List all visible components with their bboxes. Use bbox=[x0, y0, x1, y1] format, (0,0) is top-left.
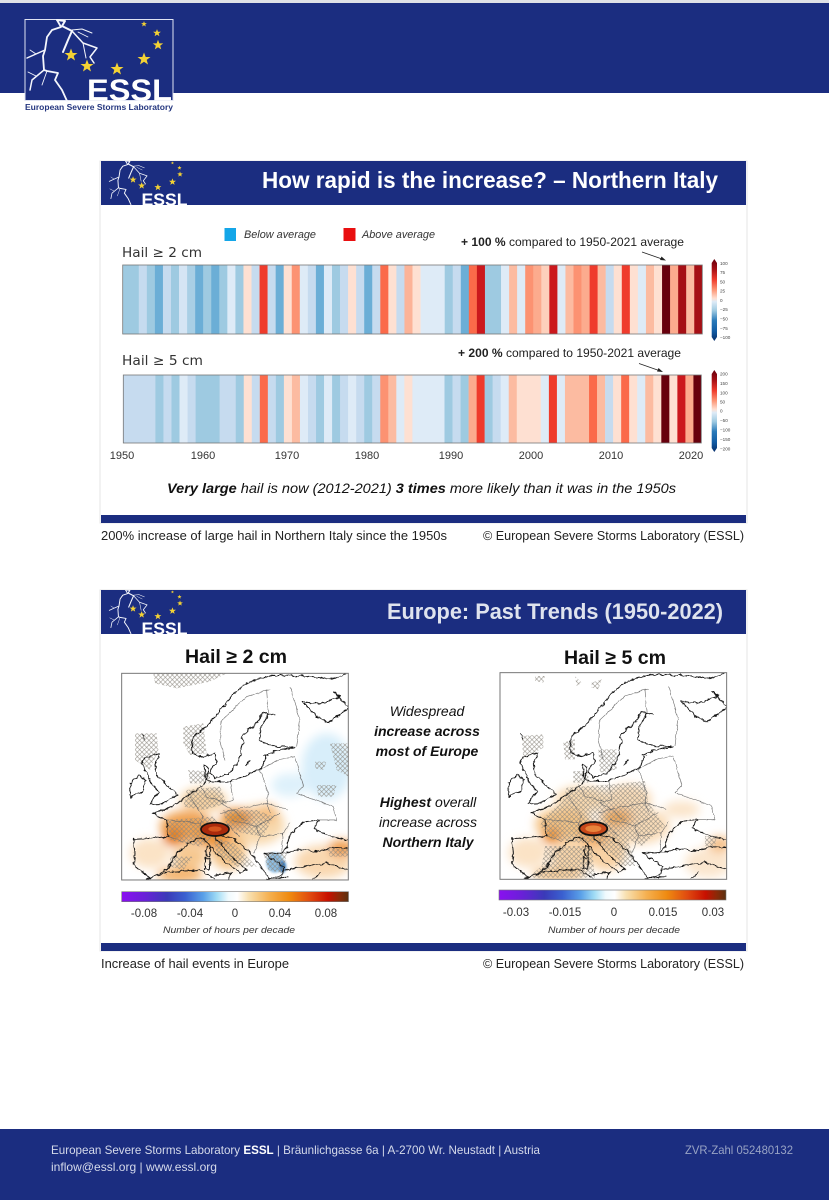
year axis: 2020 bbox=[679, 450, 703, 462]
year axis bbox=[110, 450, 703, 462]
panel footer bar bbox=[101, 943, 746, 951]
footer registration number: ZVR-Zahl 052480132 bbox=[685, 1143, 793, 1157]
colour bar: hail 5 cm map: Number of hours per decade bbox=[548, 925, 680, 936]
year axis: 2010 bbox=[599, 450, 623, 462]
arrow: to 2017 stripe, hail 5 cm bbox=[639, 364, 663, 372]
central text: highest increase bbox=[379, 794, 477, 850]
map: trends hail 2 cm bbox=[122, 673, 355, 883]
colour bar: hail 2 cm map: -0.04 bbox=[177, 908, 204, 920]
label: Hail 2 cm: Hail ≥ 2 cm bbox=[122, 245, 202, 261]
colour scale: hail 5 cm: −150 bbox=[720, 437, 731, 442]
hatched significance areas bbox=[522, 676, 717, 878]
colour scale: hail 2 cm: −75 bbox=[720, 326, 728, 331]
colour bar: hail 5 cm map: -0.03 bbox=[503, 907, 529, 919]
central text: highest increase: increase across bbox=[379, 814, 477, 830]
central text: highest increase: Highest overall bbox=[380, 794, 477, 810]
year axis: 2000 bbox=[519, 450, 543, 462]
footer band bbox=[0, 1129, 829, 1200]
footer address: inflow@essl.org | www.essl.org bbox=[51, 1160, 217, 1174]
legend: Below average bbox=[244, 229, 316, 241]
colour scale: hail 2 cm: 0 bbox=[720, 298, 723, 303]
year axis: 1990 bbox=[439, 450, 463, 462]
heading: Hail 5 cm: Hail ≥ 5 cm bbox=[564, 648, 666, 669]
colour bar: hail 2 cm map: 0.08 bbox=[315, 908, 337, 920]
panel header bar: How rapid is the increase? – Northern Italy bbox=[262, 167, 718, 193]
colour scale: hail 2 cm bbox=[712, 259, 731, 341]
colour scale: hail 5 cm: 150 bbox=[720, 381, 728, 386]
colour bar: hail 2 cm map: -0.08 bbox=[131, 908, 157, 920]
caption: northern Italy bbox=[101, 528, 744, 543]
colour scale: hail 2 cm: 100 bbox=[720, 261, 728, 266]
colour bar: hail 5 cm map: -0.015 bbox=[549, 907, 581, 919]
caption: Europe: © European Severe Storms Laboratory (ESSL) bbox=[483, 956, 744, 971]
caption: northern Italy: © European Severe Storms Laboratory (ESSL) bbox=[483, 528, 744, 543]
header band with ESSL logo bbox=[0, 3, 829, 112]
colour scale: hail 5 cm: −100 bbox=[720, 428, 731, 432]
colour scale: hail 5 cm: −50 bbox=[720, 418, 728, 423]
year axis: 1970 bbox=[275, 450, 299, 462]
year axis: 1960 bbox=[191, 450, 215, 462]
callout: +100 %: + 100 % compared to 1950-2021 average bbox=[461, 235, 684, 249]
colour scale: hail 5 cm: 50 bbox=[720, 400, 726, 404]
conclusion text: Very large hail is now (2012-2021) 3 times more likely than it was in the 1950s bbox=[167, 480, 676, 496]
logo: ESSL bbox=[25, 20, 173, 112]
colour scale: hail 5 cm: 0 bbox=[720, 408, 723, 414]
legend bbox=[224, 228, 435, 241]
colour bar: hail 5 cm map: 0.015 bbox=[649, 907, 677, 919]
panel: Europe past trends bbox=[100, 590, 747, 951]
colour scale: hail 2 cm: 25 bbox=[720, 288, 726, 294]
label: Hail 5 cm: Hail ≥ 5 cm bbox=[122, 353, 203, 369]
colour scale: hail 2 cm: 50 bbox=[720, 280, 726, 284]
colour bar: hail 2 cm map: 0 bbox=[232, 908, 238, 920]
logo: ESSL: European Severe Storms Laboratory bbox=[25, 102, 173, 112]
callout: +200 %: + 200 % compared to 1950-2021 average bbox=[458, 346, 681, 360]
colour bar: hail 2 cm map: 0.04 bbox=[269, 908, 292, 920]
warming-stripes chart: hail 5 cm bbox=[123, 375, 701, 443]
colour scale: hail 5 cm bbox=[712, 370, 731, 452]
colour scale: hail 5 cm: 100 bbox=[720, 390, 728, 396]
colour bar: hail 5 cm map: 0 bbox=[611, 907, 617, 919]
caption: Europe: Increase of hail events in Europe bbox=[101, 956, 289, 971]
logo: ESSL: ESSL bbox=[87, 72, 172, 108]
colour scale: hail 2 cm: −50 bbox=[720, 316, 728, 322]
panel header bar bbox=[101, 161, 746, 210]
warming-stripes chart: hail 2 cm bbox=[123, 265, 702, 334]
central text: widespread increase: increase across bbox=[374, 723, 480, 739]
colour bar: hail 2 cm map bbox=[122, 892, 348, 936]
panel: How rapid is the increase bbox=[100, 161, 747, 523]
colour scale: hail 2 cm: −25 bbox=[720, 307, 728, 312]
colour scale: hail 2 cm: −100 bbox=[720, 335, 731, 340]
colour scale: hail 5 cm: 200 bbox=[720, 372, 728, 376]
legend: Above average bbox=[361, 229, 435, 241]
footer address: European Severe Storms Laboratory ESSL | Bräunlichgasse 6a | A-2700 Wr. Neustadt | Austria bbox=[51, 1143, 540, 1157]
central text: widespread increase: most of Europe bbox=[376, 743, 479, 759]
footer address bbox=[51, 1143, 540, 1174]
panel header bar: ESSL bbox=[142, 190, 188, 210]
caption: Europe bbox=[101, 956, 744, 971]
central text: highest increase: Northern Italy bbox=[382, 834, 475, 850]
arrow: to 2017 stripe, hail 2 cm bbox=[642, 252, 666, 260]
central text: widespread increase: Widespread bbox=[390, 703, 465, 719]
central text: widespread increase bbox=[374, 703, 480, 759]
panel footer bar bbox=[101, 515, 746, 523]
colour bar: hail 5 cm map bbox=[499, 890, 726, 936]
panel header bar: Europe: Past Trends (1950-2022) bbox=[387, 599, 723, 624]
year axis: 1980 bbox=[355, 450, 379, 462]
panel header bar bbox=[101, 590, 746, 638]
panel header bar: ESSL bbox=[142, 618, 188, 638]
caption: northern Italy: 200% increase of large hail in Northern Italy since the 1950s bbox=[101, 528, 447, 543]
colour bar: hail 5 cm map: 0.03 bbox=[702, 907, 724, 919]
hatched significance areas bbox=[135, 673, 348, 873]
colour scale: hail 5 cm: −200 bbox=[720, 446, 731, 452]
colour bar: hail 2 cm map: Number of hours per decade bbox=[163, 925, 295, 936]
colour scale: hail 2 cm: 75 bbox=[720, 270, 726, 275]
year axis: 1950 bbox=[110, 450, 134, 462]
map: trends hail 5 cm bbox=[500, 673, 732, 882]
heading: Hail 2 cm: Hail ≥ 2 cm bbox=[185, 647, 287, 668]
